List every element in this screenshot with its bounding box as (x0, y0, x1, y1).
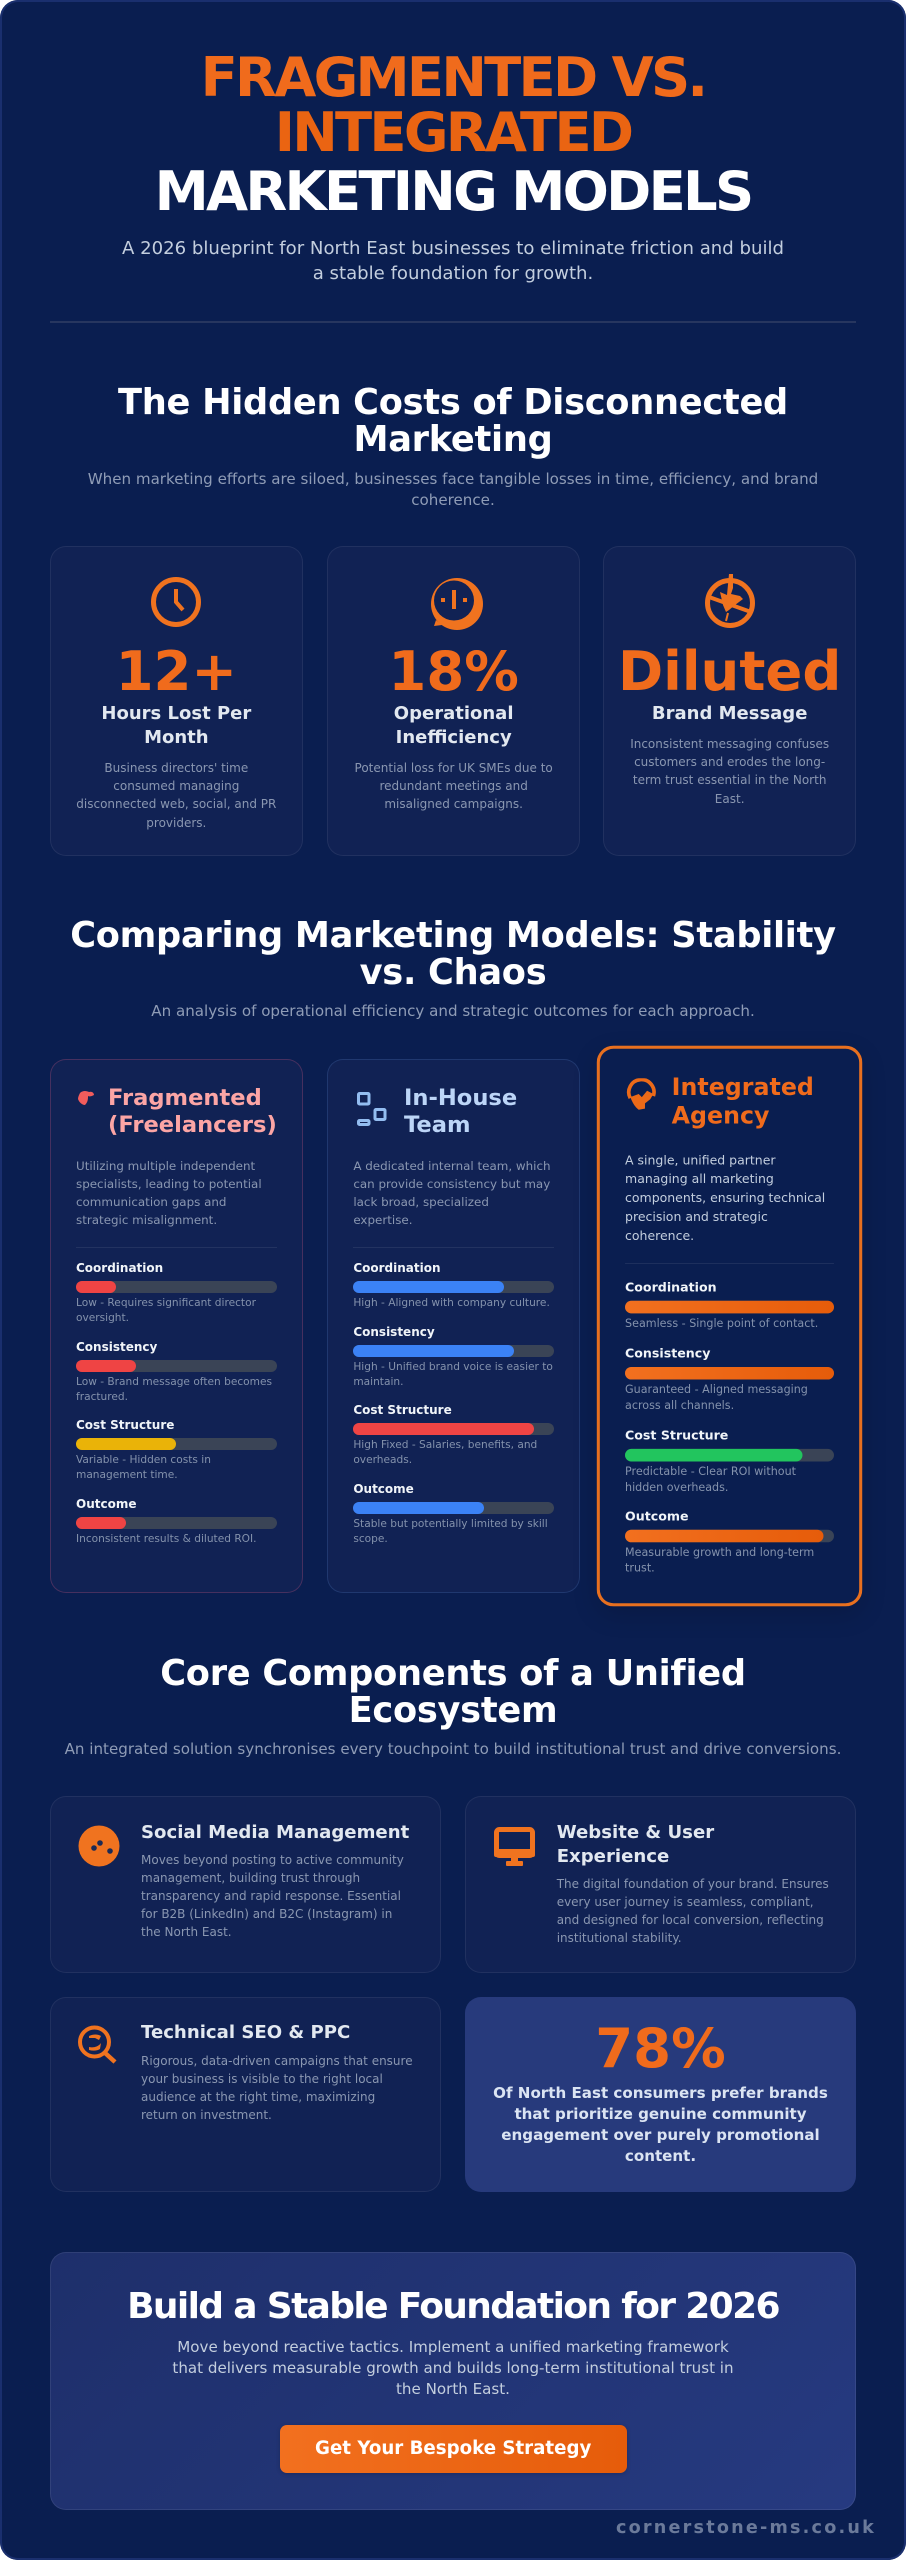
metric: outcome: Stable but potentially limited by skill (353, 1518, 548, 1530)
card description: strategic misalignment. (76, 1213, 217, 1227)
card description (353, 1159, 551, 1227)
stat description: East. (715, 792, 745, 806)
icon: fragmented (78, 1091, 94, 1105)
section heading: core components: Ecosystem (349, 1690, 557, 1730)
card description: specialists, leading to potential (76, 1177, 262, 1191)
metric: outcome (76, 1497, 277, 1545)
card title: In-House (404, 1084, 517, 1110)
metric: consistency: High - Unified brand voice is easier to (353, 1361, 553, 1373)
stat description: Potential loss for UK SMEs due to (355, 761, 553, 775)
stat description: consumed managing (113, 779, 239, 793)
callout: 78 percent stat (465, 1997, 856, 2192)
icon: clock (151, 577, 201, 627)
panel: social media management (50, 1796, 441, 1973)
card title: Team (404, 1112, 471, 1138)
metric: outcome: trust. (625, 1562, 655, 1575)
card title: Agency (672, 1102, 770, 1130)
metric: cost structure: Cost Structure (625, 1427, 729, 1442)
service description: management, building trust through (141, 1871, 360, 1885)
section intro: hidden costs (88, 470, 818, 509)
metric: consistency (625, 1346, 834, 1412)
icon: integrated (626, 1078, 656, 1110)
callout text: that prioritize genuine community (514, 2105, 807, 2123)
service description: The digital foundation of your brand. Ensures (557, 1877, 829, 1891)
service title (557, 1822, 714, 1866)
panel: in-house team (327, 1059, 580, 1593)
header subtitle (122, 238, 784, 284)
card description: expertise. (353, 1213, 412, 1227)
card description: communication gaps and (76, 1195, 226, 1209)
section intro: comparing models: An analysis of operational efficiency and strategic outcomes for each approach. (151, 1002, 755, 1020)
metric: cost structure: Predictable - Clear ROI without (625, 1465, 796, 1478)
cta button: Get Your Bespoke Strategy (315, 2438, 591, 2459)
section heading: hidden costs: Marketing (353, 419, 553, 460)
metric: coordination (353, 1261, 554, 1309)
metric: cost structure: Cost Structure (353, 1403, 452, 1417)
stat label (394, 703, 514, 748)
metric: outcome: Outcome (625, 1509, 689, 1523)
stat number: Diluted (618, 639, 841, 703)
service description: Rigorous, data-driven campaigns that ensure (141, 2054, 413, 2068)
section heading: hidden costs (118, 382, 788, 460)
card description: components, ensuring technical (625, 1190, 826, 1205)
header subtitle: a stable foundation for growth. (313, 263, 593, 284)
service title: Experience (557, 1846, 669, 1866)
section heading: core components (160, 1652, 746, 1730)
metric: cost structure: Variable - Hidden costs in (76, 1454, 211, 1466)
header title: INTEGRATED (275, 101, 631, 164)
stat label: Brand Message (652, 703, 807, 724)
service description (556, 1877, 829, 1945)
service description: institutional stability. (557, 1931, 682, 1945)
metric: cost structure (353, 1403, 554, 1466)
metric: coordination: Coordination (76, 1261, 163, 1275)
metric: cost structure (625, 1427, 834, 1493)
card description: precision and strategic (625, 1209, 768, 1224)
cta heading: Build a Stable Foundation for 2026 (127, 2286, 779, 2327)
stat description: Inconsistent messaging confuses (630, 737, 829, 751)
metric: coordination: Seamless - Single point of contact. (625, 1318, 819, 1330)
section intro: hidden costs: When marketing efforts are siloed, businesses face tangible losses in time, efficiency, and brand (88, 470, 818, 488)
service description: Moves beyond posting to active community (141, 1853, 404, 1867)
icon: broken compass (705, 574, 755, 628)
cta text: the North East. (396, 2380, 510, 2398)
service title: Website & User (557, 1822, 714, 1842)
card description: coherence. (625, 1228, 694, 1243)
section intro: hidden costs: coherence. (411, 491, 495, 509)
metric: consistency: Consistency (625, 1346, 711, 1361)
icon: in-house team (357, 1092, 386, 1126)
cta button (280, 2425, 627, 2473)
service description: return on investment. (141, 2108, 272, 2122)
callout text: engagement over purely promotional (501, 2126, 820, 2144)
card description (76, 1159, 262, 1227)
stat label: Month (144, 727, 209, 748)
metric: coordination (76, 1261, 277, 1324)
metric: outcome: scope. (353, 1533, 388, 1545)
icon: chat alert (431, 578, 483, 630)
card description (625, 1152, 826, 1243)
section heading: comparing models: Comparing Marketing Models: Stability (70, 915, 836, 956)
metric: outcome: Measurable growth and long-term (625, 1546, 815, 1559)
stat description: Business directors' time (104, 761, 248, 775)
service description (141, 2052, 413, 2124)
metric: consistency: Consistency (76, 1340, 157, 1354)
service description: every user journey is seamless, compliant, (557, 1895, 814, 1909)
metric: coordination: Coordination (625, 1280, 717, 1294)
metric: consistency: Guaranteed - Aligned messaging (625, 1384, 808, 1396)
callout text (465, 2083, 856, 2167)
service title: Social Media Management (141, 1822, 409, 1842)
panel: integrated agency (597, 1046, 862, 1606)
metric: cost structure: Cost Structure (76, 1418, 174, 1432)
callout number: 78% (595, 2016, 726, 2080)
service description: transparency and rapid response. Essential (141, 1889, 401, 1903)
card description: A dedicated internal team, which (353, 1159, 551, 1173)
card description: lack broad, specialized (353, 1195, 489, 1209)
callout text: content. (625, 2147, 696, 2165)
cta text: Move beyond reactive tactics. Implement a unified marketing framework (177, 2338, 729, 2356)
metric: outcome: Inconsistent results & diluted ROI. (76, 1533, 257, 1545)
metric: outcome: Outcome (76, 1497, 136, 1511)
panel: operational inefficiency stat (327, 546, 580, 856)
icon: magnifier (78, 2025, 117, 2064)
section heading: core components: Core Components of a Unified (160, 1652, 746, 1694)
service description: the North East. (141, 1925, 232, 1939)
card description: Utilizing multiple independent (76, 1159, 255, 1173)
stat description (355, 761, 553, 811)
footer url: cornerstone-ms.co.uk (616, 2518, 876, 2538)
icon: monitor (494, 1827, 535, 1866)
header title: FRAGMENTED VS. (201, 46, 705, 109)
section intro: core components: An integrated solution synchronises every touchpoint to build institutional trust and drive conversions. (65, 1740, 841, 1758)
stat label: Inefficiency (396, 727, 512, 748)
metric: consistency (353, 1325, 554, 1388)
card title (672, 1074, 814, 1130)
card title: Integrated (672, 1074, 814, 1101)
metric: cost structure (76, 1418, 277, 1481)
section heading: comparing models: vs. Chaos (360, 952, 546, 993)
section heading: comparing models (70, 915, 836, 993)
metric: coordination: Coordination (353, 1261, 441, 1275)
metric: cost structure: overheads. (353, 1454, 412, 1466)
stat number: 12+ (116, 639, 237, 703)
metric: cost structure: High Fixed - Salaries, benefits, and (353, 1439, 537, 1451)
header title: MARKETING MODELS (155, 160, 751, 223)
card title: (Freelancers) (108, 1112, 277, 1138)
section heading: hidden costs: The Hidden Costs of Disconnected (118, 382, 788, 423)
service description: for B2B (LinkedIn) and B2C (Instagram) in (141, 1907, 392, 1921)
stat description: term trust essential in the North (633, 773, 826, 787)
metric: consistency: across all channels. (625, 1400, 734, 1412)
panel: brand message stat (603, 546, 856, 856)
metric: outcome (625, 1509, 834, 1575)
metric: cost structure: hidden overheads. (625, 1481, 729, 1493)
metric: coordination: High - Aligned with company culture. (353, 1297, 550, 1309)
card description: managing all marketing (625, 1171, 774, 1186)
stat description: disconnected web, social, and PR (76, 797, 276, 811)
stat label (101, 703, 252, 748)
panel: call to action (50, 2252, 856, 2510)
cta text: that delivers measurable growth and builds long-term institutional trust in (172, 2359, 734, 2377)
metric: consistency (76, 1340, 277, 1403)
header title (155, 46, 751, 223)
icon: social bubble (78, 1826, 120, 1866)
header subtitle: A 2026 blueprint for North East businesses to eliminate friction and build (122, 238, 784, 259)
stat description (76, 761, 276, 830)
panel: website and user experience (465, 1796, 856, 1973)
metric: outcome (353, 1482, 554, 1545)
stat description: redundant meetings and (379, 779, 528, 793)
stat description (630, 737, 829, 806)
metric: coordination: Low - Requires significant director (76, 1297, 256, 1309)
panel: technical seo and ppc (50, 1997, 441, 2192)
cta text (50, 2337, 856, 2400)
metric: consistency: Consistency (353, 1325, 435, 1339)
callout text: Of North East consumers prefer brands (493, 2084, 828, 2102)
stat description: providers. (146, 816, 206, 830)
service description: audience at the right time, maximizing (141, 2090, 375, 2104)
panel: fragmented freelancers (50, 1059, 303, 1593)
metric: outcome: Outcome (353, 1482, 414, 1496)
card title: Fragmented (108, 1084, 262, 1110)
stat description: misaligned campaigns. (384, 797, 523, 811)
metric: coordination (625, 1280, 834, 1330)
card title (404, 1084, 517, 1138)
card description: A single, unified partner (625, 1152, 776, 1167)
stat label: Hours Lost Per (101, 703, 251, 724)
card description: can provide consistency but may (353, 1177, 550, 1191)
metric: coordination: oversight. (76, 1312, 129, 1324)
card title (108, 1084, 277, 1138)
service description: and designed for local conversion, reflecting (557, 1913, 824, 1927)
stat description: customers and erodes the long- (634, 755, 825, 769)
service description (141, 1853, 404, 1939)
metric: consistency: Low - Brand message often becomes (76, 1376, 272, 1388)
service title: Technical SEO & PPC (141, 2022, 350, 2043)
metric: consistency: maintain. (353, 1376, 403, 1388)
metric: cost structure: management time. (76, 1469, 178, 1481)
stat label: Operational (394, 703, 514, 724)
stat number: 18% (388, 639, 519, 703)
metric: consistency: fractured. (76, 1391, 128, 1403)
panel: hours lost stat (50, 546, 303, 856)
service description: your business is visible to the right local (141, 2072, 383, 2086)
